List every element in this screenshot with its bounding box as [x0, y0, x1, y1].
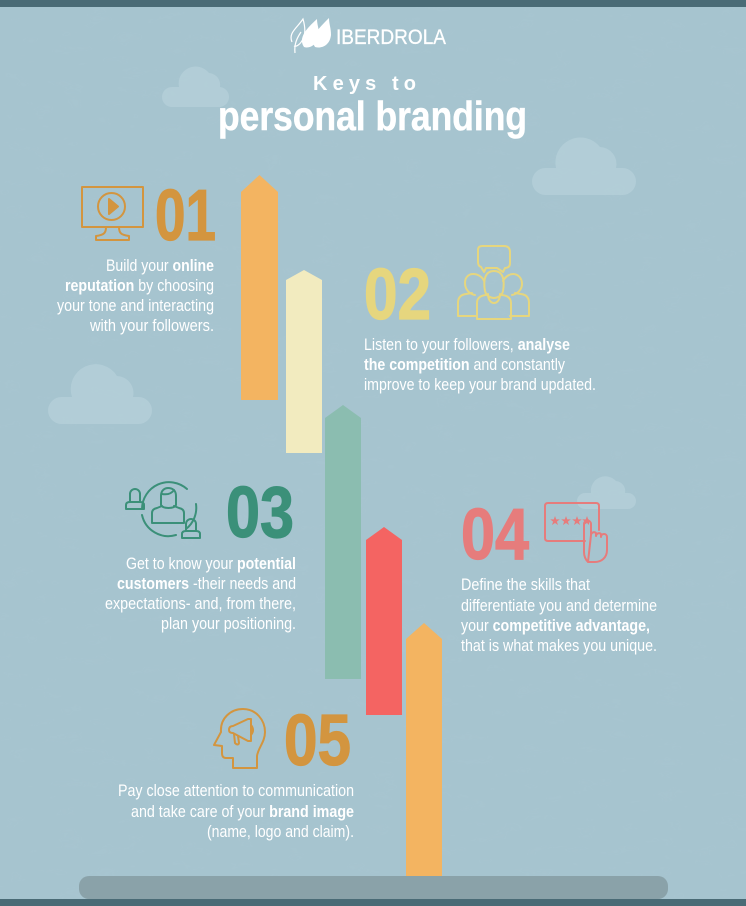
title: Keys to	[313, 73, 416, 95]
step 04	[461, 495, 657, 655]
text 02: improve to keep your brand updated.	[364, 375, 596, 394]
arrow 1	[241, 175, 278, 400]
number 05: 05	[284, 701, 351, 781]
text 04: your competitive advantage,	[461, 616, 650, 635]
arrow 4	[366, 527, 402, 715]
number 01: 01	[155, 176, 216, 256]
logo	[291, 18, 446, 53]
arrow 3	[325, 405, 361, 679]
top band	[0, 0, 746, 7]
icon: head with megaphone	[214, 709, 265, 768]
step 02	[364, 246, 596, 394]
text 02	[364, 335, 596, 394]
text 01: your tone and interacting	[57, 296, 214, 315]
icon: customers circle	[126, 482, 200, 538]
text 03	[105, 554, 296, 633]
text 01: Build your online	[106, 256, 214, 275]
text 05: (name, logo and claim).	[207, 822, 354, 841]
text 04	[461, 575, 657, 655]
text 05	[118, 781, 354, 841]
text 03: expectations- and, from there,	[105, 594, 296, 613]
text 02: Listen to your followers, analyse	[364, 335, 570, 354]
text 03: customers -their needs and	[117, 574, 296, 593]
icon: rating with pointing hand	[545, 503, 607, 562]
text 03: plan your positioning.	[161, 614, 296, 633]
icon: audience with speech bubble	[458, 246, 529, 319]
text 01	[57, 256, 214, 335]
icon: video monitor	[82, 187, 143, 240]
title	[218, 73, 527, 139]
text 05: and take care of your brand image	[131, 802, 354, 821]
step 05	[118, 701, 354, 841]
number 04: 04	[461, 495, 529, 575]
cloud: top right	[532, 138, 636, 195]
text 04: that is what makes you unique.	[461, 636, 657, 655]
cloud: small right	[577, 476, 636, 509]
text 05: Pay close attention to communication	[118, 781, 354, 800]
logo: IBERDROLA	[336, 26, 446, 49]
text 01: with your followers.	[89, 316, 214, 335]
text 04: Define the skills that	[461, 575, 590, 594]
cloud: middle left	[48, 364, 152, 424]
title: personal branding	[218, 93, 527, 139]
ground bar	[79, 876, 668, 899]
step 03	[105, 473, 296, 633]
text 04: differentiate you and determine	[461, 596, 657, 615]
text 03: Get to know your potential	[126, 554, 296, 573]
text 02: the competition and constantly	[364, 355, 565, 374]
text 01: reputation by choosing	[65, 276, 214, 295]
cloud: top left	[162, 67, 229, 107]
arrow 2	[286, 270, 322, 453]
bottom band	[0, 899, 746, 906]
step 01	[57, 176, 216, 335]
number 03: 03	[226, 473, 294, 553]
number 02: 02	[364, 255, 431, 335]
arrow 5	[406, 623, 442, 876]
